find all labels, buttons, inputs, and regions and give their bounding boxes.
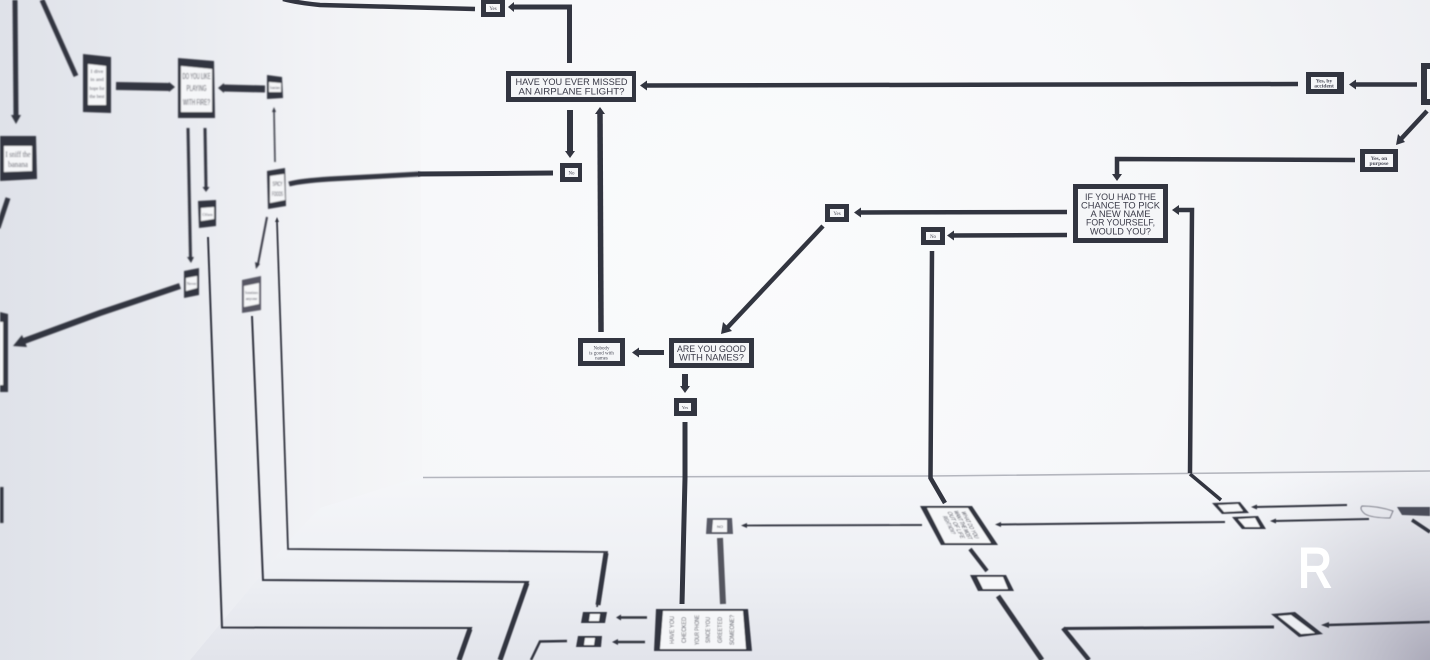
floor box: skewed statement: WHAT DO YOU: [959, 512, 980, 539]
floor box: small grey: NO: [717, 524, 723, 529]
box: never: Never: [187, 281, 197, 286]
route 1 thick end: [598, 553, 606, 605]
floor line lower right: [1064, 627, 1274, 628]
floor oval outline: [1361, 506, 1393, 518]
floor flowchart: [531, 502, 1430, 660]
box: Are you good with names?: WITH NAMES?: [679, 352, 744, 364]
floor box: small grey: [706, 518, 733, 534]
box: Are you good with names?: ARE YOU GOOD: [677, 344, 746, 355]
box: spicy foods: [267, 168, 286, 209]
box: I dive in and hope: I dive: [91, 69, 104, 75]
box: never: [184, 268, 199, 298]
box: I sniff the banana: banana: [8, 160, 28, 169]
arrow: down to No: [565, 110, 575, 158]
arrow: to Yes: [680, 374, 690, 393]
box: Yes, by accident: accident: [1314, 84, 1334, 90]
box: spicy foods: FOODS: [272, 192, 283, 198]
box: Nobody is good with names: [578, 338, 625, 366]
box: Yes, on purpose: [1360, 149, 1398, 172]
line: Yes down to floor box: [682, 422, 685, 604]
box: playing: [198, 200, 216, 228]
stub line: [0, 198, 8, 228]
floor box: [1232, 516, 1266, 529]
floor box: sideways question: YOUR PHONE: [694, 615, 701, 645]
arrow: to playing with fire: [116, 82, 175, 92]
box: do you like playing with fire: WITH FIRE?: [183, 98, 210, 107]
arrow: long from Yes by accident: [640, 80, 1298, 90]
back wall flowchart: [283, 0, 1430, 604]
floor line: [998, 596, 1042, 660]
box: Nobody is good with names: Nobody: [593, 346, 610, 352]
box: Yes, by accident: [1306, 72, 1344, 94]
floor box: sideways question: GREETED: [717, 617, 724, 643]
box: grey lower: [242, 276, 261, 313]
box: If you had the chance to pick a new name: FOR YOURSELF,: [1086, 218, 1155, 228]
line: diagonal to grey box: [255, 217, 267, 269]
box: Yes, on purpose: Yes, on: [1371, 156, 1387, 162]
route 2 thick end: [500, 583, 527, 660]
floor arrow lower right: [1321, 622, 1430, 628]
floor box: skewed statement: RIGHT NOW?: [940, 516, 957, 534]
box: Yes: [825, 204, 849, 222]
line: No to left wall: [418, 173, 553, 174]
box: spicy foods: SPICY: [272, 182, 282, 188]
box: Yes: Yes: [833, 212, 841, 217]
box: If you had the chance to pick a new name: CHANCE TO PICK: [1081, 200, 1160, 210]
arrow: to Yes: [854, 208, 1067, 218]
arrow: down to maybe: [202, 128, 210, 192]
line: diagonal to I dive: [42, 0, 76, 76]
box: If you had the chance to pick a new name: [1073, 184, 1168, 243]
floor corner shadow: [1170, 470, 1430, 660]
box: If you had the chance to pick a new name: IF YOU HAD THE: [1085, 192, 1156, 202]
box: grey lower: anyone: [246, 296, 257, 301]
arrow: to pick a new name: [1112, 159, 1355, 181]
box: small top: [267, 75, 283, 99]
floor arrow: [612, 639, 645, 645]
floor thin arrow: [1251, 504, 1347, 510]
arrow: big to left box: [13, 286, 180, 347]
arrow: down to never: [187, 128, 194, 263]
box: right partial: [1421, 63, 1430, 105]
box: No: [560, 163, 582, 182]
floor thin line left of box: [900, 524, 922, 526]
box: Are you good with names?: [669, 338, 754, 368]
floor box: sideways question: HAVE YOU: [669, 616, 676, 644]
box: I sniff the banana: [0, 136, 37, 181]
box: do you like playing with fire: PLAYING: [186, 84, 206, 93]
floor box: sideways question: SINCE YOU: [705, 617, 712, 643]
route 3 thick end: [459, 629, 470, 660]
top line into Yes: [283, 0, 475, 9]
box: Yes: Yes: [682, 405, 689, 410]
arrow: from floor up to new name: [1172, 205, 1192, 473]
line: No down to floor: [930, 251, 945, 503]
box: left bottom partial: [0, 487, 4, 523]
arrow: down to I sniff: [11, 0, 21, 124]
line: spicy foods to no: [289, 174, 420, 184]
arrow: Yes diagonal to are you good: [721, 226, 823, 334]
box: No: No: [930, 235, 937, 240]
floor box: skewed statement: WANT THE MOST: [952, 511, 973, 539]
box: I dive in and hope: hope for: [90, 85, 105, 92]
box: Yes (top): [481, 0, 505, 17]
floor line right: [1412, 520, 1430, 532]
floor arrow: [616, 614, 647, 620]
box: If you had the chance to pick a new name: WOULD YOU?: [1090, 226, 1151, 236]
box: small top: Sometimes: [270, 85, 280, 90]
floor box: skewed statement: OUT OF LIFE: [945, 512, 966, 539]
floor box: sideways question: SOMEONE?: [729, 615, 736, 645]
arrow: to Nobody: [632, 348, 664, 358]
floor box: sideways question: CHECKED: [681, 617, 688, 643]
floor small box: [581, 612, 607, 623]
box: grey lower: Sometimes: [245, 290, 258, 295]
left wall flowchart (out of focus): [0, 0, 420, 523]
floor route to small box: [531, 641, 567, 660]
alcove side wall: [320, 0, 422, 508]
arrow: nobody up to missed flight: [595, 107, 605, 332]
floor box: skewed statement: [920, 506, 998, 545]
box: Yes, by accident: Yes, by: [1316, 78, 1332, 84]
wall-to-floor route 2: [252, 316, 528, 660]
box: I dive in and hope: in and: [90, 77, 104, 83]
box: Have you ever missed an airplane flight?: [506, 71, 636, 102]
arrow: diagonal to Yes on purpose: [1396, 111, 1427, 145]
arrow: to Yes by accident: [1349, 80, 1417, 90]
back wall: [0, 0, 1430, 480]
floor line: [970, 549, 987, 571]
box: do you like playing with fire: [178, 58, 215, 118]
box: Have you ever missed an airplane flight?: HAVE YOU EVER MISSED: [516, 77, 628, 88]
box: No: [921, 227, 945, 245]
floor arrow to statement box: [995, 522, 1225, 527]
box: do you like playing with fire: DO YOU LIKE: [182, 72, 210, 81]
floor thin arrow: [741, 523, 922, 528]
logo: R: R: [1298, 536, 1332, 599]
box: I dive in and hope: the best: [90, 94, 105, 100]
line: foot of new-name arrow on floor: [1190, 474, 1221, 500]
floor dark partial box: [1397, 507, 1430, 516]
box: Yes, on purpose: purpose: [1370, 161, 1389, 167]
floor line lower right descent: [1063, 628, 1089, 660]
box: Yes (top): Yes: [489, 7, 497, 12]
left wall: [0, 0, 320, 660]
floor box: [1212, 502, 1249, 514]
box: No: No: [568, 172, 575, 176]
box: left partial: [0, 312, 8, 392]
floor and wall routes: [208, 217, 607, 660]
floor line: [720, 538, 723, 604]
arrow: thin up: [272, 107, 276, 162]
floor box: sideways question: [654, 609, 752, 651]
floor box: small: [970, 575, 1014, 591]
wall base line: [423, 471, 1430, 478]
wall-to-floor route 3: [208, 237, 471, 660]
arrow: from missed flight to Yes: [508, 2, 570, 63]
box: playing: Often: [202, 212, 213, 217]
arrow: left to fire box: [218, 83, 265, 93]
floor: [190, 470, 1430, 660]
box: Nobody is good with names: names: [595, 356, 608, 362]
box: Yes: [674, 398, 697, 416]
box: I dive in and hope: [83, 54, 111, 113]
arrow: to No: [947, 230, 1067, 240]
box: Nobody is good with names: is good with: [589, 352, 614, 356]
floor small box: [576, 636, 602, 647]
wall-to-floor route 1: [275, 217, 607, 607]
box: If you had the chance to pick a new name: A NEW NAME: [1090, 209, 1150, 219]
floor box: lower right: [1271, 612, 1323, 637]
floor thin arrow: [1270, 518, 1369, 524]
box: I sniff the banana: I sniff the: [6, 150, 31, 159]
box: Have you ever missed an airplane flight?: AN AIRPLANE FLIGHT?: [518, 86, 624, 98]
